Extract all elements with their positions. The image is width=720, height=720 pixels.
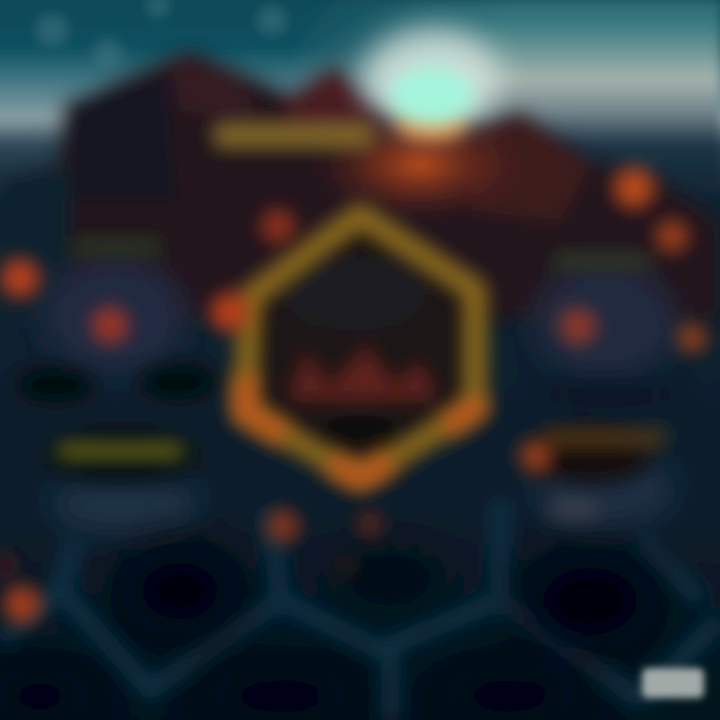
sky dots <box>36 0 287 69</box>
hexagon orange accents <box>245 375 475 478</box>
title bar <box>214 122 374 148</box>
watermark badge <box>642 668 704 698</box>
hexagon network lines <box>0 500 720 720</box>
left lower heading <box>47 429 197 481</box>
mountains <box>0 50 720 320</box>
central hexagon panel <box>244 212 476 480</box>
left upper heading <box>72 238 162 256</box>
panel: right upper <box>533 252 680 409</box>
hexagon fill <box>244 212 476 480</box>
panel: left upper <box>17 238 216 402</box>
hexagon outline <box>245 215 475 478</box>
panel: left lower <box>47 429 203 537</box>
chart silhouettes <box>283 257 438 446</box>
right upper dark band <box>540 381 680 409</box>
sunset glow <box>305 105 535 225</box>
orange nodes <box>0 168 706 622</box>
left upper dark icons <box>17 365 216 402</box>
right upper heading <box>552 252 652 270</box>
right lower heading <box>528 427 652 483</box>
dark voids bottom <box>0 544 660 720</box>
sun <box>364 28 500 139</box>
panel: right lower <box>528 427 677 532</box>
